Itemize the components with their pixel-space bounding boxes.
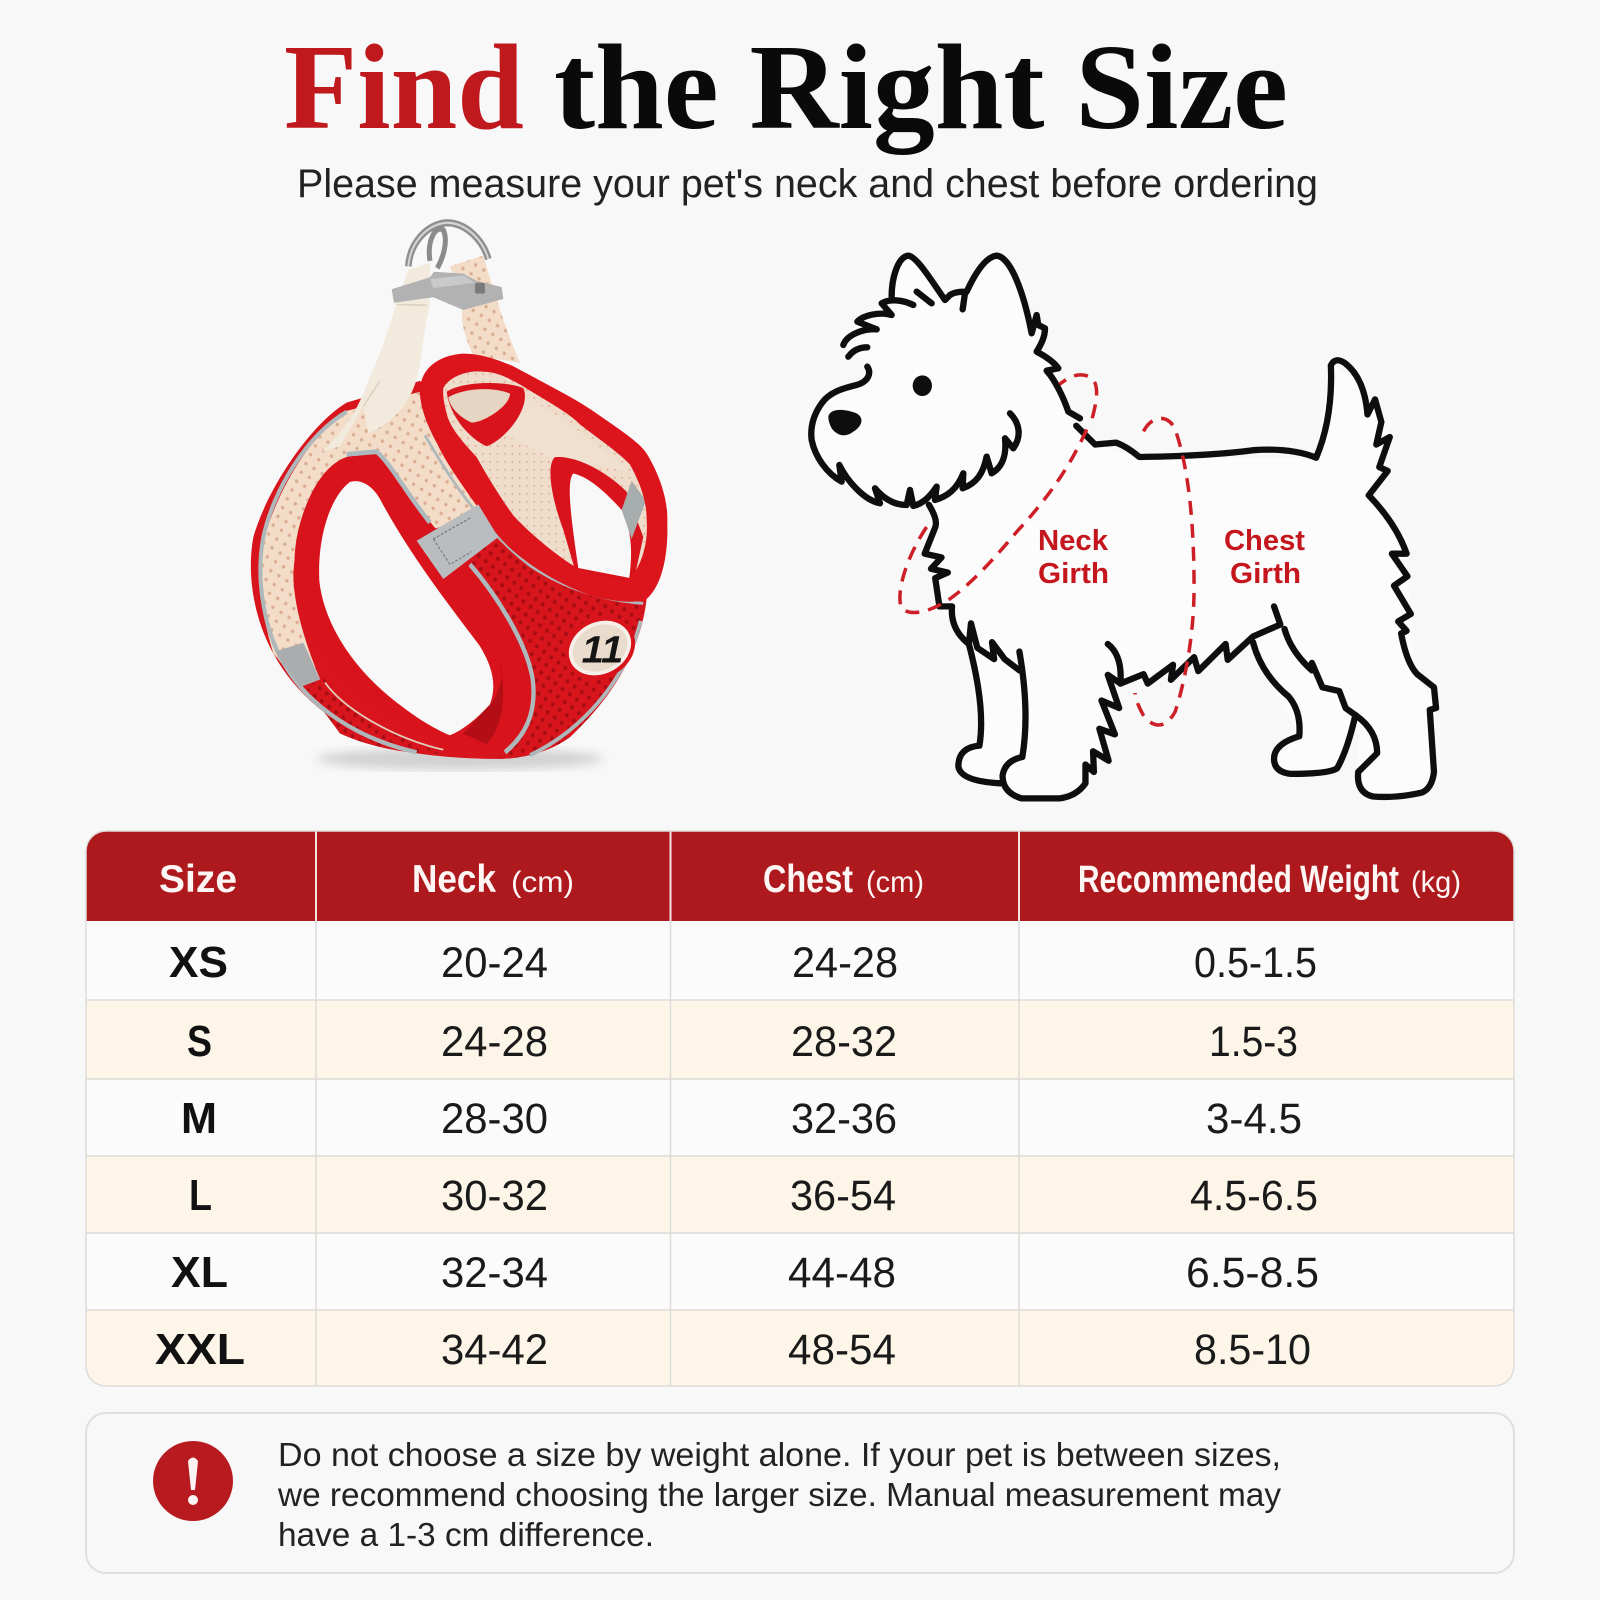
chest girth label (1224, 525, 1305, 590)
table neck column: 28-30 (441, 1095, 548, 1143)
black outline strokes (925, 360, 1436, 798)
table header row: (cm) (511, 866, 574, 899)
chest girth label: Girth (1230, 558, 1301, 590)
table size column: L (189, 1171, 212, 1220)
icon: warning exclamation (153, 1441, 233, 1521)
table header row: (cm) (866, 866, 924, 899)
table weight column: 0.5-1.5 (1194, 939, 1317, 987)
girth lines (900, 375, 1194, 725)
neck girth label (1038, 525, 1109, 590)
small inner opening (447, 383, 525, 446)
neck girth label: Neck (1038, 525, 1109, 557)
harness body base (251, 381, 647, 759)
leg opening hole (319, 481, 493, 735)
table weight column: 6.5-8.5 (1186, 1249, 1319, 1297)
rim piping (347, 452, 534, 752)
harness product photo: 11 (582, 628, 623, 671)
chest girth dashed line (1135, 418, 1194, 725)
note text: we recommend choosing the larger size. Manual measurement may (277, 1476, 1281, 1513)
table header row: Chest (763, 858, 853, 901)
right side opening (550, 457, 643, 583)
table weight column: 1.5-3 (1209, 1018, 1298, 1066)
table header row: (kg) (1411, 866, 1461, 899)
dog head (811, 256, 1080, 506)
table header row: Recommended Weight (1078, 859, 1399, 901)
leg opening rim (294, 454, 533, 752)
size table (86, 831, 1514, 1386)
table size column (155, 938, 245, 1374)
number 11 badge (557, 606, 643, 690)
back strap (450, 255, 520, 363)
table neck column: 20-24 (441, 939, 548, 987)
table header row: Neck (412, 858, 496, 901)
table header row: Size (159, 858, 237, 901)
neck opening interior (420, 354, 663, 599)
table size column: XXL (155, 1325, 245, 1374)
table weight column: 4.5-6.5 (1190, 1172, 1318, 1220)
table size column: S (187, 1017, 212, 1066)
red mesh panel (470, 530, 643, 759)
table neck column: 34-42 (441, 1326, 548, 1374)
nose (828, 410, 861, 435)
ground shadow (317, 748, 603, 770)
reflective piping (260, 412, 643, 755)
plastic buckle (392, 272, 503, 310)
neck rim (420, 354, 667, 602)
neck girth label: Girth (1038, 558, 1109, 590)
table weight column: 8.5-10 (1194, 1326, 1311, 1374)
table chest column: 36-54 (790, 1172, 896, 1220)
note text (277, 1436, 1281, 1553)
table neck column: 32-34 (441, 1249, 548, 1297)
table weight column: 3-4.5 (1206, 1095, 1302, 1143)
table weight column (1186, 939, 1319, 1374)
title: Find (284, 20, 524, 155)
note text: Do not choose a size by weight alone. If your pet is between sizes, (278, 1436, 1281, 1473)
table chest column: 32-36 (791, 1095, 897, 1143)
reflective tabs (417, 504, 498, 579)
table size column: XL (171, 1248, 228, 1297)
beige mesh side panel (261, 392, 483, 686)
eye (913, 375, 932, 396)
table neck column: 24-28 (441, 1018, 548, 1066)
chest girth label: Chest (1224, 525, 1305, 557)
metal rings (408, 223, 488, 268)
table size column: M (181, 1094, 217, 1143)
table neck column: 30-32 (441, 1172, 548, 1220)
harness product photo (251, 223, 667, 770)
table header row (159, 858, 1461, 901)
dog body and legs (811, 254, 1436, 798)
title: the Right Size (554, 20, 1288, 155)
subtitle: Please measure your pet's neck and chest before ordering (297, 162, 1318, 206)
dog silhouette fill (811, 254, 1436, 798)
table chest column (788, 939, 898, 1374)
front strap (322, 263, 430, 452)
table chest column: 24-28 (792, 939, 898, 987)
neck girth dashed line (900, 375, 1097, 613)
note panel (86, 1413, 1514, 1573)
table chest column: 48-54 (788, 1326, 896, 1374)
table size column: XS (169, 938, 228, 987)
dog outline illustration (811, 254, 1436, 798)
table neck column (441, 939, 548, 1374)
table chest column: 44-48 (788, 1249, 896, 1297)
note text: have a 1-3 cm difference. (278, 1516, 654, 1553)
table chest column: 28-32 (791, 1018, 897, 1066)
